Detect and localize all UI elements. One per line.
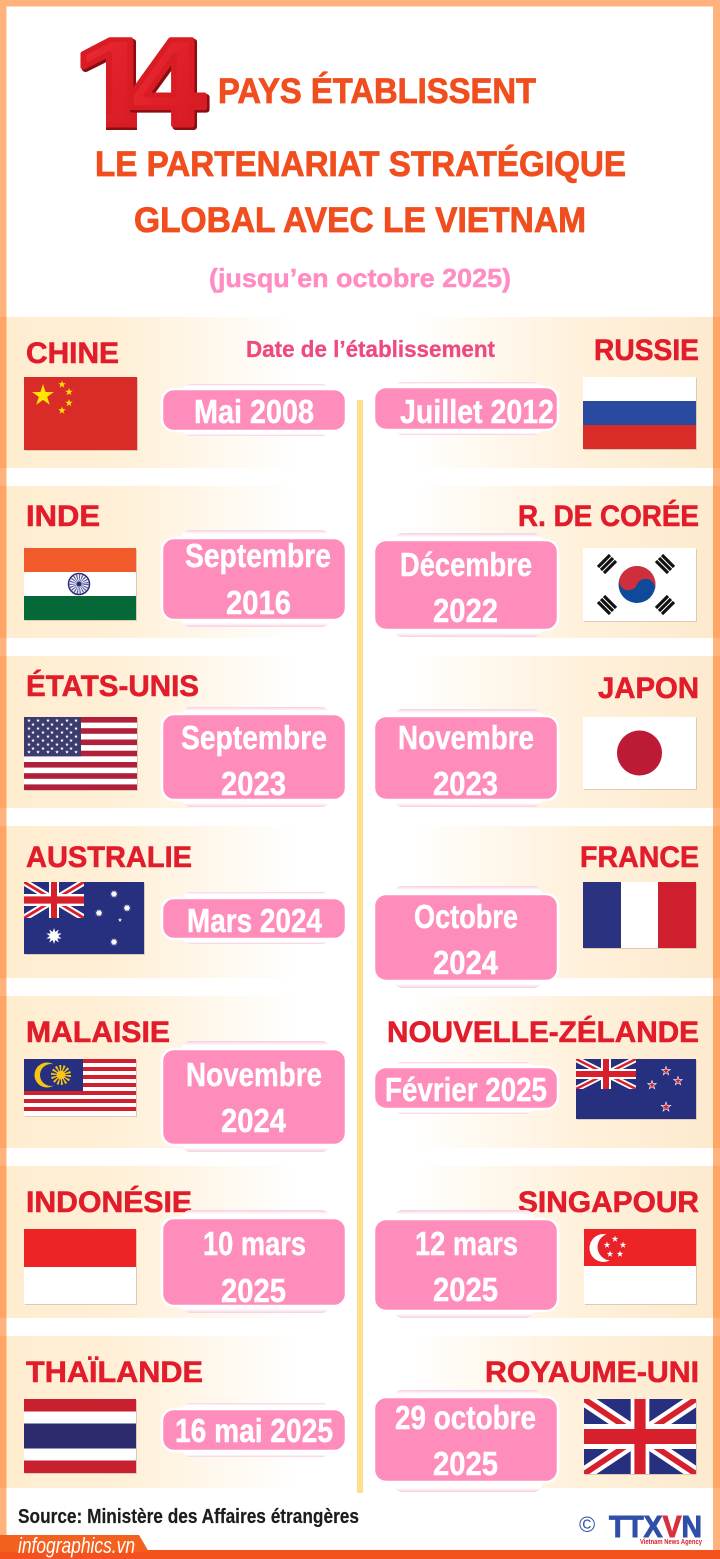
big number 14: 4 [131, 16, 207, 154]
date: Mars 2024: Mars 2024 [187, 902, 323, 939]
date: 16 mai 2025 [162, 1403, 346, 1457]
label: ROYAUME-UNI [485, 1356, 699, 1389]
label: MALAISIE [26, 1016, 170, 1049]
label: NOUVELLE-ZÉLANDE [387, 1015, 699, 1049]
title line 2: LE PARTENARIAT STRATÉGIQUE [95, 144, 626, 184]
label: R. DE CORÉE [518, 499, 699, 533]
flag: China [24, 377, 138, 451]
entry: Japan [374, 672, 699, 807]
date: Décembre 2022: Décembre [400, 546, 532, 583]
date: 10 mars 2025 [162, 1210, 346, 1313]
date: Septembre 2016: Septembre [185, 537, 331, 574]
date: 29 octobre 2025: 29 octobre [395, 1399, 536, 1436]
flag: Thailand [24, 1399, 137, 1474]
entry: France [374, 841, 699, 988]
website label: infographics.vn [18, 1533, 135, 1558]
title line 3: GLOBAL AVEC LE VIETNAM [134, 201, 586, 240]
date: 10 mars 2025: 10 mars [203, 1225, 306, 1262]
logo: TTXVN [579, 1509, 702, 1546]
date: Mars 2024 [162, 892, 346, 944]
date: Juillet 2012 [374, 382, 558, 435]
column heading: date of establishment: Date de l’établissement [246, 336, 495, 362]
row backgrounds [0, 317, 720, 1488]
label: JAPON [598, 672, 699, 705]
flag: Singapore [584, 1229, 697, 1305]
entry: China [24, 337, 346, 451]
date: Novembre 2024 [162, 1041, 346, 1152]
date: 10 mars 2025: 2025 [221, 1272, 286, 1309]
big number 14: 1 [73, 14, 159, 152]
date: Octobre 2024: 2024 [433, 944, 499, 981]
flag: New Zealand [576, 1059, 697, 1120]
date: Novembre 2023 [374, 709, 558, 807]
flag: Russia [583, 377, 697, 450]
label: CHINE [26, 337, 119, 370]
date: Mai 2008 [162, 384, 346, 436]
date: Novembre 2023: Novembre [398, 719, 534, 756]
date: Décembre 2022: 2022 [433, 592, 498, 629]
date: Novembre 2024: Novembre [186, 1056, 322, 1093]
label: SINGAPOUR [518, 1186, 699, 1219]
entry: Malaysia [24, 1016, 346, 1152]
date: Septembre 2023 [162, 707, 346, 807]
big number 14 [80, 37, 210, 130]
flag: Australia [24, 882, 145, 955]
date: Février 2025: Février 2025 [385, 1071, 547, 1108]
flag: United States [24, 717, 138, 791]
big number 14: 1 [75, 16, 161, 154]
date: Septembre 2016 [162, 530, 346, 627]
entry: Thailand [24, 1356, 346, 1474]
copyright symbol: © [579, 1512, 595, 1537]
title [73, 14, 626, 293]
central timeline line [357, 400, 363, 1493]
label: ÉTATS-UNIS [26, 669, 199, 703]
entry: United Kingdom [374, 1356, 699, 1492]
flag: Indonesia [24, 1229, 137, 1305]
date: Mai 2008: Mai 2008 [194, 393, 314, 430]
entry: Indonesia [24, 1185, 346, 1313]
agency wordmark: TTXVN [609, 1509, 702, 1544]
date: Septembre 2016: 2016 [226, 584, 291, 621]
entry: South Korea [374, 499, 699, 637]
flag: South Korea [583, 548, 697, 622]
entry: Russia [374, 334, 699, 450]
label: INDONÉSIE [26, 1185, 192, 1219]
label: INDE [26, 500, 100, 533]
entry: Singapore [374, 1186, 699, 1318]
date: Octobre 2024: Octobre [414, 898, 518, 935]
date: Février 2025 [374, 1062, 558, 1114]
big number 14: 4 [129, 14, 205, 152]
entry: India [24, 500, 346, 627]
date: 29 octobre 2025 [374, 1390, 558, 1492]
date: Septembre 2023: Septembre [181, 719, 327, 756]
date: Novembre 2024: 2024 [221, 1102, 287, 1139]
entry: Australia [24, 841, 346, 955]
date: 12 mars 2025: 2025 [433, 1271, 498, 1308]
flag: Malaysia [24, 1059, 137, 1117]
entry: United States [24, 669, 346, 807]
date: Octobre 2024 [374, 886, 558, 988]
title line 1: PAYS ÉTABLISSENT [218, 71, 536, 111]
label: FRANCE [580, 841, 699, 874]
footer bar [0, 1533, 720, 1559]
flag: India [24, 548, 137, 621]
flag: Japan [583, 717, 697, 790]
agency tagline: Vietnam News Agency [640, 1539, 702, 1546]
label: RUSSIE [594, 334, 699, 367]
label: THAÏLANDE [26, 1356, 203, 1389]
date: 12 mars 2025: 12 mars [415, 1225, 518, 1262]
source line: Source: Ministère des Affaires étrangères [18, 1506, 359, 1528]
date: Novembre 2023: 2023 [433, 765, 498, 802]
flag: France [583, 882, 697, 949]
date: 16 mai 2025: 16 mai 2025 [175, 1412, 333, 1449]
date: Septembre 2023: 2023 [221, 765, 286, 802]
flag: United Kingdom [584, 1399, 697, 1475]
date: Décembre 2022 [374, 533, 558, 637]
subtitle: (jusqu’en octobre 2025) [209, 263, 511, 293]
label: AUSTRALIE [26, 841, 192, 874]
entry: New Zealand [374, 1015, 699, 1120]
date: 29 octobre 2025: 2025 [433, 1445, 498, 1482]
date: Juillet 2012: Juillet 2012 [400, 393, 554, 430]
date: 12 mars 2025 [374, 1210, 558, 1318]
